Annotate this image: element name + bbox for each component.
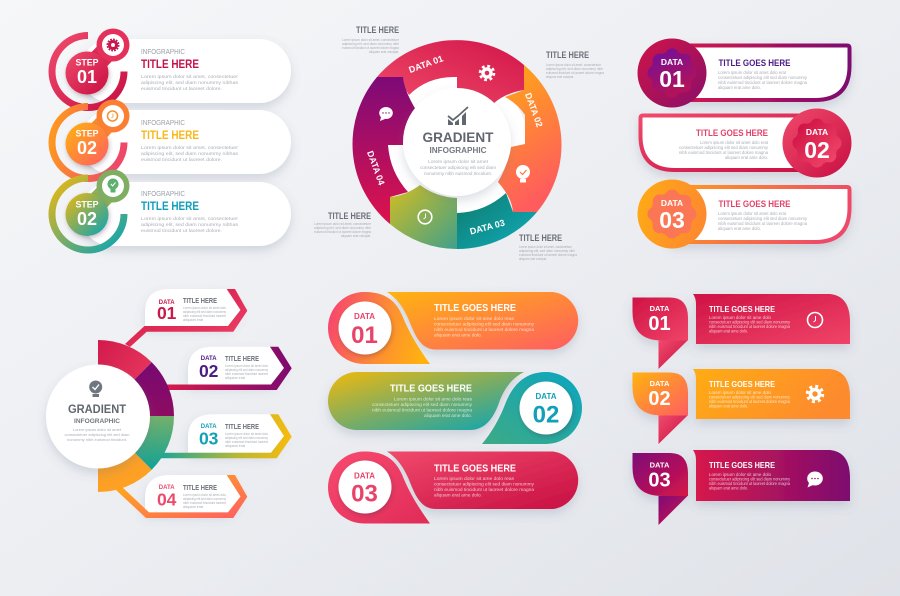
callout: title top right: Lorem ipsum dolor sit amet, consectetuer <box>546 63 602 67</box>
banner 1: DATA <box>354 312 375 321</box>
outlined card 2 <box>640 108 852 178</box>
tag 1: aliquam erat <box>183 318 203 322</box>
wheel segment: data 04 green <box>390 185 457 249</box>
outlined card 1: DATA <box>661 57 683 67</box>
wheel segment: data 04 purple <box>353 77 416 224</box>
callout: title bottom left <box>314 211 372 238</box>
banner 2: DATA <box>535 392 557 401</box>
step card 2: INFOGRAPHIC <box>141 120 185 127</box>
step card 1: STEP <box>76 58 98 68</box>
wheel segment: data 02 <box>498 65 561 212</box>
callout: title bottom right: aliquam erat volutpat. <box>519 257 547 261</box>
tag 3: 03 <box>199 428 219 448</box>
step card 1: adipiscing elit, sed diam nonummy nibhas <box>141 80 239 85</box>
flag row 3 <box>632 450 850 525</box>
step card 3: Lorem ipsum dolor sit amet, consectetuer <box>141 216 239 221</box>
tag 3: aliquam erat <box>225 444 245 448</box>
tag 2: adipiscing elit sed diam nonummy <box>225 368 268 372</box>
banner 3: consectetuer adipiscing elit sed diam nonummy <box>434 482 535 486</box>
flag row 1: 01 <box>648 313 671 335</box>
wheel segment: data 02: DATA 02 <box>523 91 545 129</box>
banner 2: TITLE GOES HERE <box>390 384 472 394</box>
flag row 1: consectetuer adipiscing elit sed diam nonummy <box>709 320 791 324</box>
step card 3: STEP <box>76 200 98 210</box>
tag 2: nibh euismod tincidunt laoreet <box>225 372 268 376</box>
tag 4: Lorem ipsum dolor sit amet dolo <box>183 493 226 497</box>
flag row 1: aliquam erat ame dolo. <box>709 328 748 334</box>
wheel centre: INFOGRAPHIC <box>430 146 487 155</box>
centre disc <box>46 364 150 468</box>
callout: title bottom left: euismod tincidunt ut laoreet dolore magna <box>314 230 371 234</box>
step card 2: STEP <box>76 128 98 138</box>
callout: title top left: TITLE HERE <box>356 25 399 36</box>
tag 4: 04 <box>157 490 177 510</box>
tag 3: nibh euismod tincidunt laoreet <box>225 440 268 444</box>
outlined card 3: DATA <box>661 198 683 208</box>
ring segments <box>98 340 174 492</box>
tag 3: Lorem ipsum dolor sit amet dolo <box>225 432 268 436</box>
tag 2: Lorem ipsum dolor sit amet dolo <box>225 364 268 368</box>
callout: title top right <box>546 50 604 79</box>
outlined card 2: TITLE GOES HERE <box>696 128 768 139</box>
step card 1 <box>52 28 291 108</box>
callout: title bottom left: Lorem ipsum dolor sit amet, consectetuer <box>314 222 372 226</box>
tag 2: DATA <box>201 356 217 362</box>
step card 2: 02 <box>77 138 97 158</box>
step card 2: adipiscing elit, sed diam nonummy nibhas <box>141 151 239 156</box>
wheel segment: data 03 <box>457 193 537 249</box>
callout: title top left: adipiscing elit, sed diam nonummy nibh <box>342 42 399 46</box>
wheel centre <box>403 88 511 196</box>
step card 3: euismod tincidunt ut laoreet dolore. <box>141 228 222 233</box>
outlined card 2: 02 <box>804 137 830 163</box>
callout: title top left: aliquam erat volutpat. <box>369 50 399 54</box>
flag row 2: aliquam erat ame dolo. <box>709 404 748 408</box>
wheel centre: consectetuer adipiscing elit sed diam <box>420 165 496 170</box>
flag row 1: TITLE GOES HERE <box>709 304 775 314</box>
flag row 1: nibh euismod tincidunt ut laoreet dolore magna <box>709 324 791 329</box>
step card 3: TITLE HERE <box>141 201 199 213</box>
outlined card 3: nibh euismod tincidunt ut laoreet dolore magna <box>718 221 807 226</box>
tag 1: adipiscing elit sed diam nonummy <box>183 310 226 314</box>
step card 3 <box>52 170 291 250</box>
tag 4: nibh euismod tincidunt laoreet <box>183 501 226 505</box>
banner 1: nibh euismod tincidunt ut laoreet dolore magna <box>434 327 534 332</box>
callout: title bottom right: adipiscing elit, sed diam nonummy nibh <box>519 249 575 253</box>
callout: title bottom right: Lorem ipsum dolor sit amet, consectetuer <box>519 245 573 249</box>
tag 1: TITLE HERE <box>183 298 217 305</box>
banner 2: consectetuer adipiscing elit sed diam nonummy <box>372 402 473 407</box>
banner 3: aliquam erat ame dolo. <box>434 492 482 498</box>
outlined card 1: 01 <box>659 66 685 92</box>
banner 3: nibh euismod tincidunt ut laoreet dolore magna <box>434 487 534 492</box>
callout: title top right: adipiscing elit, sed diam nonummy nibh <box>546 67 603 71</box>
outlined card 1: aliquam erat ame dolo. <box>718 85 761 90</box>
callout: title top right: TITLE HERE <box>546 50 589 61</box>
callout: title top left <box>342 25 400 54</box>
tag 3: DATA <box>201 424 217 430</box>
callout: title top right: euismod tincidunt ut laoreet dolore magna <box>546 71 604 75</box>
step card 2: euismod tincidunt ut laoreet dolore. <box>141 157 222 162</box>
wheel centre: Lorem ipsum dolor sit amet <box>428 159 489 164</box>
step card 3: 02 <box>77 209 97 229</box>
tag 1 <box>125 289 247 347</box>
centre disc: GRADIENT <box>68 402 127 416</box>
step card 2: TITLE HERE <box>141 130 199 142</box>
wheel centre: GRADIENT <box>422 129 494 145</box>
banner 2: 02 <box>533 402 559 428</box>
tag 3: adipiscing elit sed diam nonummy <box>225 436 268 440</box>
tag 1: Lorem ipsum dolor sit amet dolo <box>183 306 226 310</box>
banner 1: aliquam erat ame dolo. <box>434 332 482 338</box>
outlined card 1: Lorem ipsum dolor sit amet dolo erat <box>718 70 787 75</box>
tag 1: 01 <box>157 303 177 323</box>
outlined card 3: consectetuer adipiscing elit sed diam nonummy <box>718 216 808 221</box>
tag 3 <box>158 414 292 458</box>
banner 3: Lorem ipsum dolor sit ame dolo reas <box>434 476 515 481</box>
panel: gradient banners <box>328 292 582 524</box>
tag 2: TITLE HERE <box>225 356 259 363</box>
callout: title bottom left: aliquam erat volutpat. <box>341 234 371 238</box>
outlined card 2: DATA <box>806 127 828 137</box>
tag 4: aliquam erat <box>183 505 203 509</box>
outlined card 1: nibh euismod tincidunt ut laoreet dolore magna <box>718 80 807 85</box>
banner 3: DATA <box>354 471 375 480</box>
centre disc: consectetuer adipiscing elit sed diam <box>64 433 130 437</box>
flag row 3: 03 <box>648 470 671 492</box>
centre disc: Lorem ipsum dolor sit amet <box>73 428 122 432</box>
outlined card 3: aliquam erat ame dolo. <box>718 226 761 231</box>
flag row 2: 02 <box>648 388 671 410</box>
tag 3: TITLE HERE <box>225 424 259 431</box>
centre disc: nonummy nibh euismod tincidunt. <box>67 438 127 442</box>
outlined card 3: TITLE GOES HERE <box>718 199 790 210</box>
callout: title top left: Lorem ipsum dolor sit amet, consectetuer <box>342 38 400 42</box>
flag row 3: aliquam erat ame dolo. <box>709 486 748 490</box>
tag 4: DATA <box>159 485 175 491</box>
callout: title top left: euismod tincidunt ut laoreet dolore magna <box>342 46 399 50</box>
tag 2: 02 <box>199 361 219 381</box>
banner 1: TITLE GOES HERE <box>434 303 516 314</box>
callout: title bottom right <box>519 233 577 261</box>
callout: title bottom left: adipiscing elit, sed diam nonummy nibh <box>314 226 371 230</box>
step card 1: 01 <box>77 67 97 87</box>
tag 1: nibh euismod tincidunt laoreet <box>183 314 226 318</box>
panel: flag cards <box>632 294 850 525</box>
wheel centre: nonummy nibh euismod tincidunt. <box>424 171 492 176</box>
flag row 2: consectetuer adipiscing elit sed diam nonummy <box>709 394 791 400</box>
flag row 3: TITLE GOES HERE <box>709 460 775 470</box>
centre disc: INFOGRAPHIC <box>74 418 120 425</box>
outlined card 2: nibh euismod tincidunt ut laoreet dolore magna <box>679 150 768 155</box>
flag row 3: Lorem ipsum dolor sit ame dolo <box>709 472 772 477</box>
tag 1: DATA <box>159 300 175 306</box>
step card 1: TITLE HERE <box>141 59 199 71</box>
wheel segment: data 01: DATA 01 <box>407 53 445 75</box>
outlined card 2: Lorem ipsum dolor sit amet dolo erat <box>700 140 769 145</box>
banner 2: Lorem ipsum dolor sit ame dolo reas <box>394 396 473 402</box>
flag row 2: DATA <box>650 379 670 388</box>
wheel segment: data 03: DATA 03 <box>469 218 506 237</box>
tag 2 <box>165 347 292 390</box>
banner 2: aliquam erat ame dolo. <box>424 413 472 418</box>
outlined card 1 <box>638 38 850 108</box>
banner 1: consectetuer adipiscing elit sed diam nonummy <box>434 322 535 326</box>
outlined card 3: Lorem ipsum dolor sit amet dolo erat <box>718 211 787 216</box>
flag row 2 <box>632 369 850 444</box>
step card 2: Lorem ipsum dolor sit amet, consectetuer <box>141 145 239 150</box>
banner 3: TITLE GOES HERE <box>434 464 516 474</box>
step card 1: euismod tincidunt ut laoreet dolore. <box>141 86 222 91</box>
outlined card 1: consectetuer adipiscing elit sed diam nonummy <box>718 75 808 80</box>
banner 3: 03 <box>351 481 378 508</box>
banner 1: Lorem ipsum dolor sit ame dolo reas <box>434 316 515 321</box>
outlined card 2: aliquam erat ame dolo. <box>725 155 768 160</box>
outlined card 1: TITLE GOES HERE <box>718 58 790 69</box>
tag 4: TITLE HERE <box>183 485 217 492</box>
outlined card 3 <box>638 180 850 248</box>
panel: step list <box>52 28 291 250</box>
callout: title bottom right: TITLE HERE <box>519 233 562 244</box>
flag row 3: consectetuer adipiscing elit sed diam nonummy <box>709 476 791 482</box>
step card 3: INFOGRAPHIC <box>141 191 185 198</box>
outlined card 3: 03 <box>659 207 685 233</box>
flag row 3: nibh euismod tincidunt ut laoreet dolore magna <box>709 481 791 486</box>
banner 1: 01 <box>351 322 378 349</box>
panel: radial tag diagram <box>46 289 292 518</box>
callout: title bottom left: TITLE HERE <box>328 211 371 222</box>
banner 2 <box>328 372 582 444</box>
tag 4: adipiscing elit sed diam nonummy <box>183 497 226 501</box>
flag row 2: Lorem ipsum dolor sit ame dolo <box>709 390 772 395</box>
callout: title top right: aliquam erat volutpat. <box>546 75 574 79</box>
tag 2: aliquam erat <box>225 376 245 380</box>
panel: gradient wheel <box>314 25 604 261</box>
step card 3: adipiscing elit, sed diam nonummy nibhas <box>141 222 239 227</box>
wheel segment: data 01 <box>377 40 524 104</box>
banner 1 <box>328 292 578 364</box>
flag row 1: DATA <box>650 304 670 313</box>
step card 1: INFOGRAPHIC <box>141 49 185 56</box>
flag row 1 <box>632 294 850 369</box>
wheel segment: data 04 purple: DATA 04 <box>365 149 387 187</box>
step card 1: Lorem ipsum dolor sit amet, consectetuer <box>141 74 239 79</box>
banner 3 <box>328 452 578 524</box>
panel: outlined title cards <box>638 38 852 248</box>
flag row 1: Lorem ipsum dolor sit ame dolo <box>709 315 772 320</box>
step card 2 <box>52 100 291 178</box>
tag 4 <box>116 475 247 518</box>
flag row 3: DATA <box>650 460 670 470</box>
callout: title bottom right: euismod tincidunt ut laoreet dolore magna <box>519 253 577 257</box>
flag row 2: TITLE GOES HERE <box>709 379 775 389</box>
flag row 2: nibh euismod tincidunt ut laoreet dolore magna <box>709 399 791 404</box>
outlined card 2: consectetuer adipiscing elit sed diam nonummy <box>679 145 769 150</box>
banner 2: nibh euismod tincidunt ut laoreet dolore magna <box>372 408 472 412</box>
